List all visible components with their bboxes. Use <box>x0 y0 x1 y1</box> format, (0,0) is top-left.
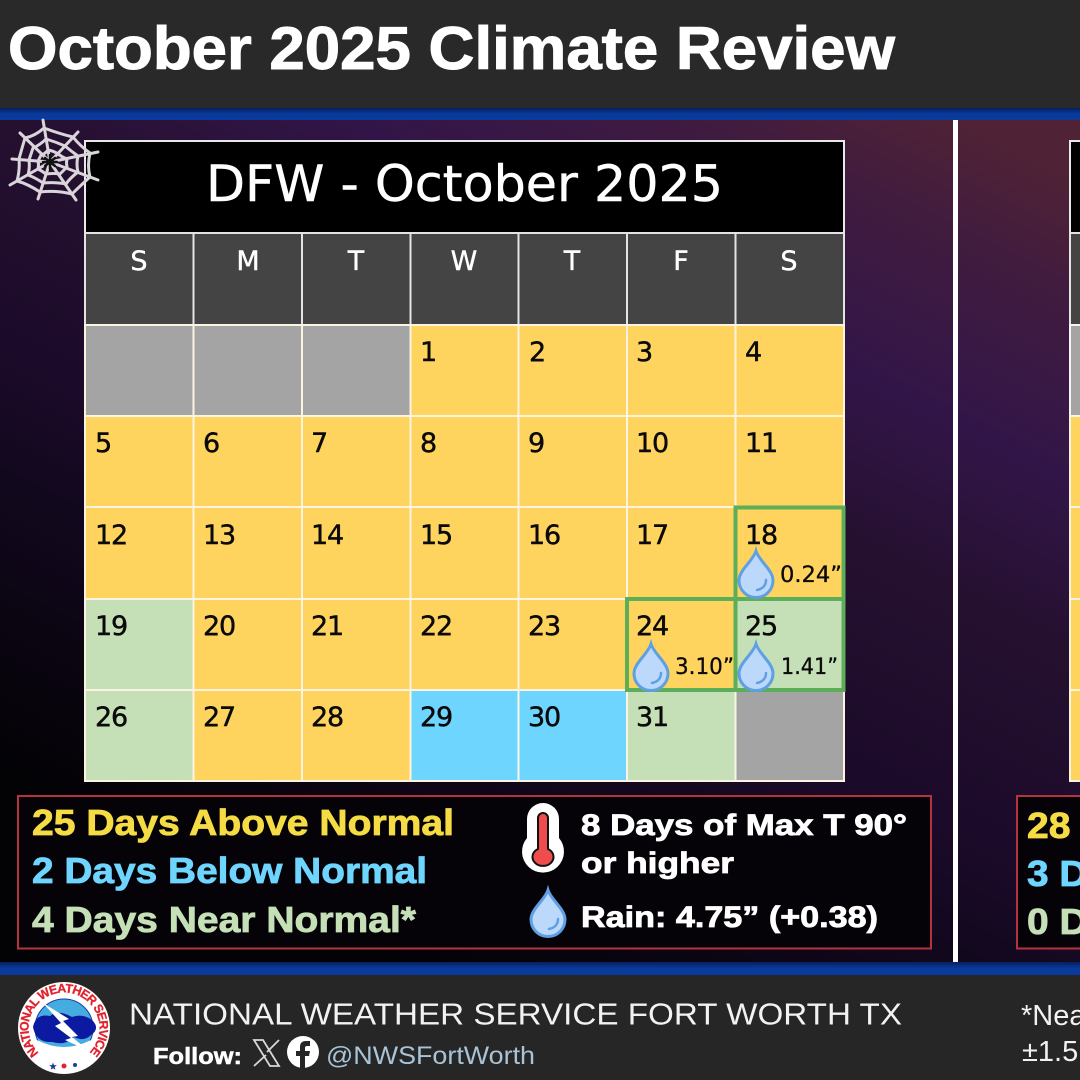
title: October 2025 Climate Review <box>8 15 895 82</box>
weekday header row: W <box>451 246 477 277</box>
weekday header row: S <box>780 246 798 277</box>
day numbers: 22 <box>420 611 452 642</box>
day numbers: 4 <box>745 337 761 368</box>
day numbers: 19 <box>95 611 127 642</box>
below normal count: 2 Days Below Normal <box>32 850 427 891</box>
panel: second summary, cropped <box>1017 796 1080 948</box>
near normal count: 4 Days Near Normal* <box>32 899 416 940</box>
title banner <box>0 0 1080 120</box>
day numbers: 2 <box>529 337 545 368</box>
follow label: Follow: <box>153 1043 242 1069</box>
footer <box>0 962 1080 1080</box>
day numbers: 20 <box>203 611 235 642</box>
day numbers: 5 <box>95 428 111 459</box>
weekday header row <box>85 233 844 325</box>
rain amount: Oct 18 <box>739 551 842 598</box>
day numbers: 27 <box>203 702 235 733</box>
day numbers: 8 <box>420 428 436 459</box>
day numbers: 17 <box>636 520 668 551</box>
icon: X <box>254 1040 279 1066</box>
icon: spider web <box>10 120 98 200</box>
day numbers: 14 <box>311 520 343 551</box>
day numbers: 24 <box>636 611 668 642</box>
rain amount: Oct 25 <box>739 644 838 690</box>
max temperature stat: 8 Days of Max T 90° <box>581 809 907 842</box>
social handle: @NWSFortWorth <box>326 1042 535 1070</box>
day numbers: 3 <box>636 337 652 368</box>
rain amount: Oct 18: 0.24” <box>780 563 842 588</box>
weekday header row: M <box>236 246 260 277</box>
day numbers: 13 <box>203 520 235 551</box>
day numbers: 11 <box>745 428 777 459</box>
icon: Facebook <box>287 1036 319 1068</box>
near normal footnote <box>1021 1000 1080 1068</box>
day numbers: 9 <box>528 428 544 459</box>
day numbers: 31 <box>636 702 668 733</box>
day numbers: 15 <box>420 520 452 551</box>
day numbers: 21 <box>311 611 343 642</box>
day numbers: 6 <box>203 428 219 459</box>
calendar title: DFW - October 2025 <box>206 155 723 213</box>
background gradient <box>0 120 1080 965</box>
day numbers: 10 <box>636 428 668 459</box>
max temperature stat line two: or higher <box>581 847 734 880</box>
icon: rain drop <box>531 890 565 936</box>
day numbers: 25 <box>745 611 777 642</box>
day numbers: 28 <box>311 702 343 733</box>
day numbers: 30 <box>528 702 560 733</box>
office name: NATIONAL WEATHER SERVICE FORT WORTH TX <box>129 998 902 1032</box>
day numbers: 18 <box>745 520 777 551</box>
day numbers: 7 <box>311 428 327 459</box>
rain amount: Oct 24 <box>634 644 734 690</box>
icon: thermometer <box>522 803 564 873</box>
weekday header row: T <box>563 246 581 277</box>
day numbers: 16 <box>528 520 560 551</box>
panel divider <box>953 120 958 963</box>
rain day highlights <box>627 508 844 690</box>
day numbers: 12 <box>95 520 127 551</box>
day numbers <box>95 337 777 733</box>
weekday header row: F <box>673 246 689 277</box>
calendar day cells <box>85 325 844 781</box>
above normal count: 25 Days Above Normal <box>32 802 454 843</box>
icon: NWS logo: NATIONAL WEATHER SERVICE <box>20 984 108 1058</box>
weekday header row: T <box>347 246 365 277</box>
rain amount: Oct 24: 3.10” <box>675 655 734 680</box>
day numbers: 29 <box>420 702 452 733</box>
day numbers: 23 <box>528 611 560 642</box>
day numbers: 26 <box>95 702 127 733</box>
rainfall stat: Rain: 4.75” (+0.38) <box>581 901 878 934</box>
panel: DFW calendar <box>85 141 844 781</box>
panel: DFW summary <box>18 796 931 948</box>
weekday header row: S <box>130 246 148 277</box>
rain amount: Oct 25: 1.41” <box>781 655 838 680</box>
panel: second calendar, cropped <box>1070 141 1080 781</box>
calendar title <box>85 141 844 233</box>
day numbers: 1 <box>420 337 436 368</box>
